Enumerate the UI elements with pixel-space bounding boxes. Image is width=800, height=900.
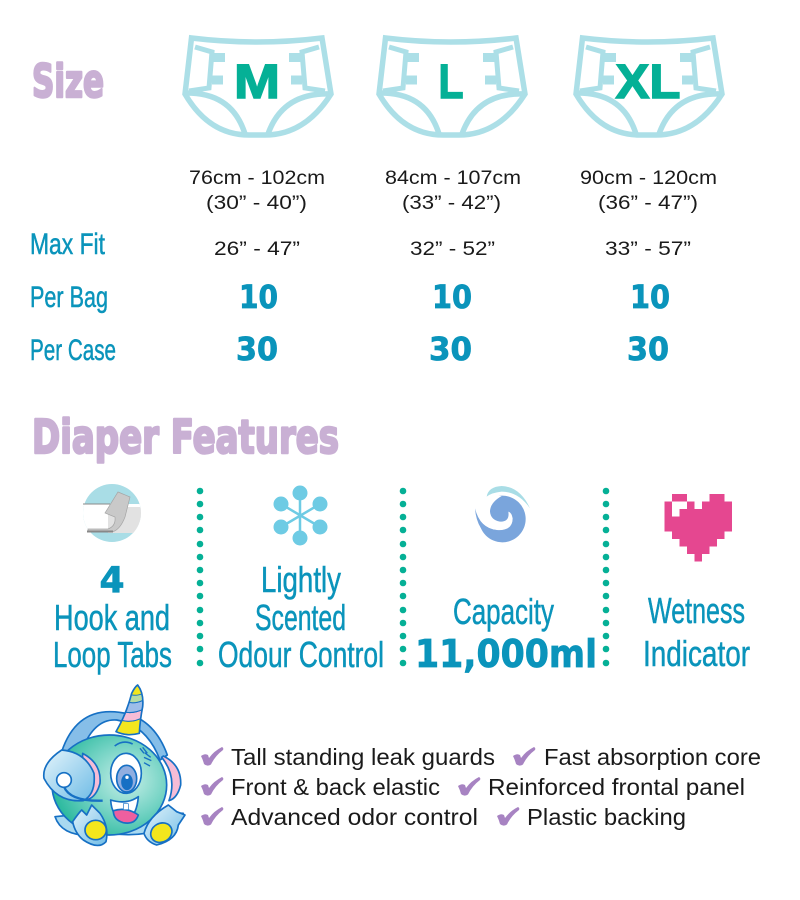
- per case values: [236, 330, 669, 368]
- per case values: 30: [429, 330, 472, 368]
- text: 4 Hook and Loop Tabs: [53, 560, 172, 675]
- per case values: 30: [236, 330, 278, 368]
- row 2: Front & back elastic: [231, 774, 440, 800]
- row 1: [201, 744, 761, 770]
- waist size XL: (36” - 47”): [598, 193, 698, 214]
- text: Lightly Scented Odour Control: Scented: [255, 597, 346, 638]
- text: 4 Hook and Loop Tabs: Loop Tabs: [53, 634, 172, 675]
- max fit values: 33” - 57”: [605, 239, 691, 260]
- text: Capacity 11,000ml: Capacity: [453, 591, 554, 632]
- icon: hook and loop tab: [83, 484, 141, 542]
- row 3: Plastic backing: [527, 804, 686, 830]
- label: Per Bag: Per Bag: [30, 281, 108, 314]
- max fit values: 26” - 47”: [214, 239, 300, 260]
- divider dots 2: [400, 488, 406, 666]
- text: Wetness Indicator: Indicator: [643, 633, 750, 674]
- max fit values: 32” - 52”: [410, 239, 495, 260]
- per bag values: 10: [432, 278, 472, 316]
- label: Per Case: Per Case: [30, 334, 116, 367]
- divider dots 3: [603, 488, 609, 666]
- text: Lightly Scented Odour Control: Odour Control: [218, 634, 384, 675]
- waist size L: [385, 168, 521, 214]
- waist size L: 84cm - 107cm: [385, 168, 521, 189]
- diaper icon: L: [379, 38, 525, 135]
- heading: Size: Size: [32, 55, 104, 108]
- text: Lightly Scented Odour Control: [218, 559, 384, 675]
- waist size XL: [580, 168, 717, 214]
- diaper icon: XL: [576, 38, 722, 135]
- max fit values: [214, 239, 691, 260]
- diaper icon: XL: XL: [616, 56, 680, 109]
- diaper icon: M: M: [234, 56, 280, 109]
- text: Lightly Scented Odour Control: Lightly: [261, 559, 341, 600]
- waist size M: [189, 168, 325, 214]
- icon: pixel heart: [664, 494, 732, 562]
- per bag values: [239, 278, 670, 316]
- feature checklist: [201, 744, 761, 830]
- waist size L: (33” - 42”): [402, 193, 501, 214]
- heading: Diaper Features: Diaper Features: [32, 410, 339, 464]
- per case values: 30: [627, 330, 669, 368]
- diaper icon: L: L: [438, 56, 464, 109]
- text: Wetness Indicator: [643, 590, 750, 674]
- per bag values: 10: [239, 278, 278, 316]
- row 3: Advanced odor control: [231, 804, 478, 830]
- row 2: Reinforced frontal panel: [488, 774, 745, 800]
- row 2: [201, 774, 745, 800]
- row 3: [201, 804, 686, 830]
- icon: absorption swirl: [473, 486, 530, 542]
- waist size M: (30” - 40”): [206, 193, 307, 214]
- diaper icon: M: [185, 38, 331, 135]
- text: 4 Hook and Loop Tabs: Hook and: [54, 597, 170, 638]
- per bag values: 10: [630, 278, 670, 316]
- waist size XL: 90cm - 120cm: [580, 168, 717, 189]
- waist size M: 76cm - 102cm: [189, 168, 325, 189]
- row 1: Fast absorption core: [544, 744, 761, 770]
- text: Capacity 11,000ml: 11,000ml: [415, 632, 597, 676]
- label: Max Fit: Max Fit: [30, 228, 106, 261]
- row 1: Tall standing leak guards: [231, 744, 495, 770]
- text: Wetness Indicator: Wetness: [648, 590, 745, 631]
- mascot: unicorn monster with headset: [44, 683, 185, 846]
- text: Capacity 11,000ml: [415, 591, 597, 676]
- icon: scent molecule: [274, 486, 327, 545]
- divider dots 1: [197, 488, 203, 666]
- text: 4 Hook and Loop Tabs: 4: [99, 560, 125, 601]
